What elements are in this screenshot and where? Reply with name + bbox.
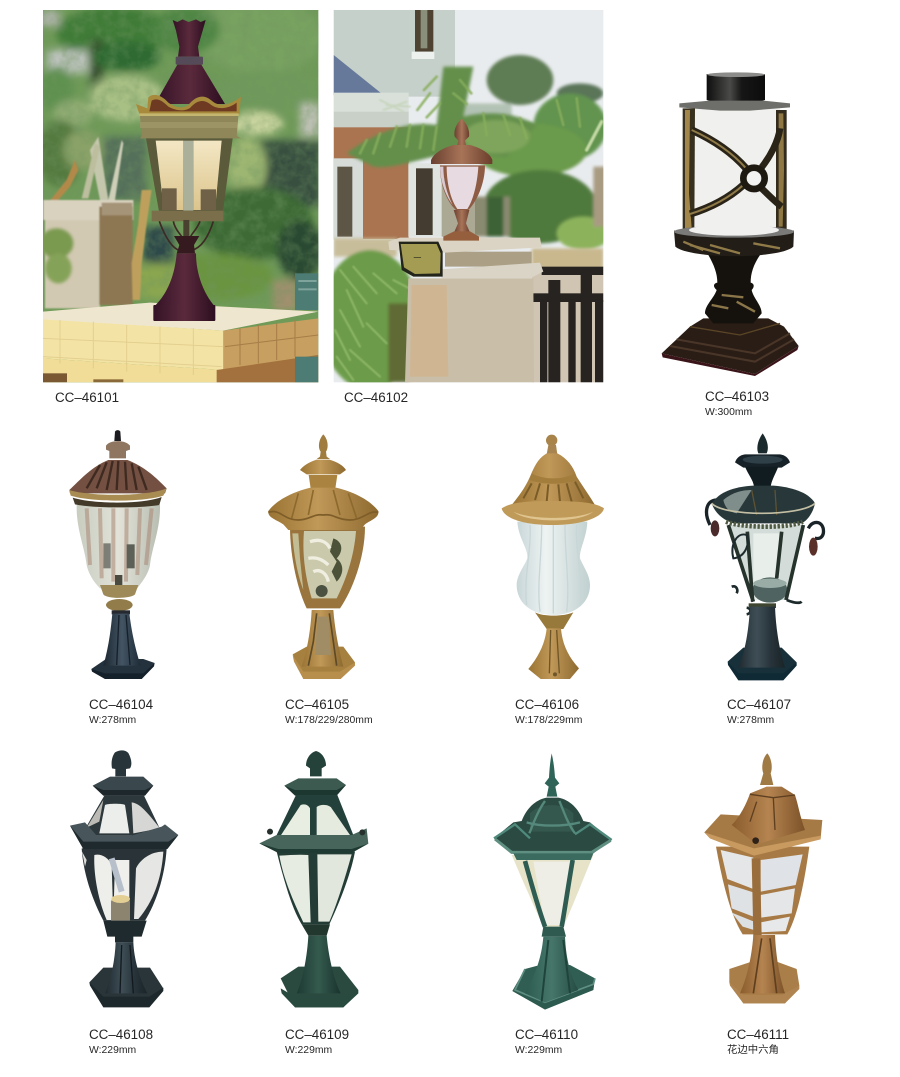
icon: frosted vase lamp with gold cap (502, 435, 604, 679)
panel: CC-46108 product (70, 750, 178, 1056)
label: CC-46103 (705, 389, 769, 418)
icon: dark hex lantern with clear panes (70, 750, 178, 1007)
label: CC-46107: W:278mm (727, 715, 774, 726)
label: CC-46104: CC–46104 (89, 697, 154, 712)
label: CC-46110: W:229mm (515, 1045, 562, 1056)
label: CC-46106: CC–46106 (515, 697, 579, 712)
label: CC-46109 (285, 1027, 349, 1056)
panel: CC-46107 product (707, 433, 823, 726)
panel: CC-46105 product (268, 434, 378, 726)
label: CC-46110 (515, 1027, 578, 1056)
label: CC-46107 (727, 697, 791, 726)
label: CC-46111: CC–46111 (727, 1027, 789, 1042)
icon: gold lamp with hammered glass (268, 434, 378, 679)
label: CC-46106: W:178/229mm (515, 715, 582, 726)
label: CC-46105 (285, 697, 373, 726)
label: CC-46111: 花边中六角 (727, 1043, 779, 1056)
label: CC-46104 (89, 697, 154, 726)
label: CC-46108: W:229mm (89, 1045, 136, 1056)
panel: CC-46111 product (704, 753, 822, 1056)
icon: black and gold cylinder lamp (662, 72, 799, 376)
photo: villa gate pillar with copper lamp: 一 (413, 254, 421, 263)
label: CC-46103: W:300mm (705, 407, 752, 418)
label: CC-46105: CC–46105 (285, 697, 349, 712)
panel: CC-46106 product (502, 435, 604, 726)
icon: copper hex lantern (704, 753, 822, 1003)
icon: clear fluted glass bronze lamp (69, 430, 167, 679)
panel: CC-46110 product (494, 753, 612, 1056)
label: CC-46108 (89, 1027, 153, 1056)
label: CC-46110: CC–46110 (515, 1027, 578, 1042)
label: CC-46107: CC–46107 (727, 697, 791, 712)
label: CC-46102: CC–46102 (344, 390, 408, 405)
icon: verdigris lantern with spike finial (494, 753, 612, 1010)
label: CC-46106 (515, 697, 582, 726)
panel: CC-46103 product (662, 72, 799, 418)
panel: CC-46101 photo and label (37, 0, 323, 405)
label: CC-46109: CC–46109 (285, 1027, 349, 1042)
label: CC-46105: W:178/229/280mm (285, 715, 373, 726)
icon: dark green hex lantern with frosted panes (259, 751, 368, 1007)
icon: lamp in photo 1 (136, 19, 241, 321)
label: CC-46109: W:229mm (285, 1045, 332, 1056)
icon: lamp in photo 2 (431, 118, 492, 241)
label: CC-46101: CC–46101 (55, 390, 119, 405)
label: CC-46104: W:278mm (89, 715, 136, 726)
panel: CC-46104 product (69, 430, 167, 726)
icon: black wrought iron lantern (707, 433, 823, 680)
photo: garden scene with burgundy pillar lamp (37, 0, 323, 382)
label: CC-46111 (727, 1027, 789, 1056)
label: CC-46108: CC–46108 (89, 1027, 153, 1042)
panel: CC-46102 photo and label (320, 10, 610, 405)
label: CC-46103: CC–46103 (705, 389, 769, 404)
photo: villa gate pillar with copper lamp (320, 10, 610, 390)
panel: CC-46109 product (259, 751, 368, 1056)
